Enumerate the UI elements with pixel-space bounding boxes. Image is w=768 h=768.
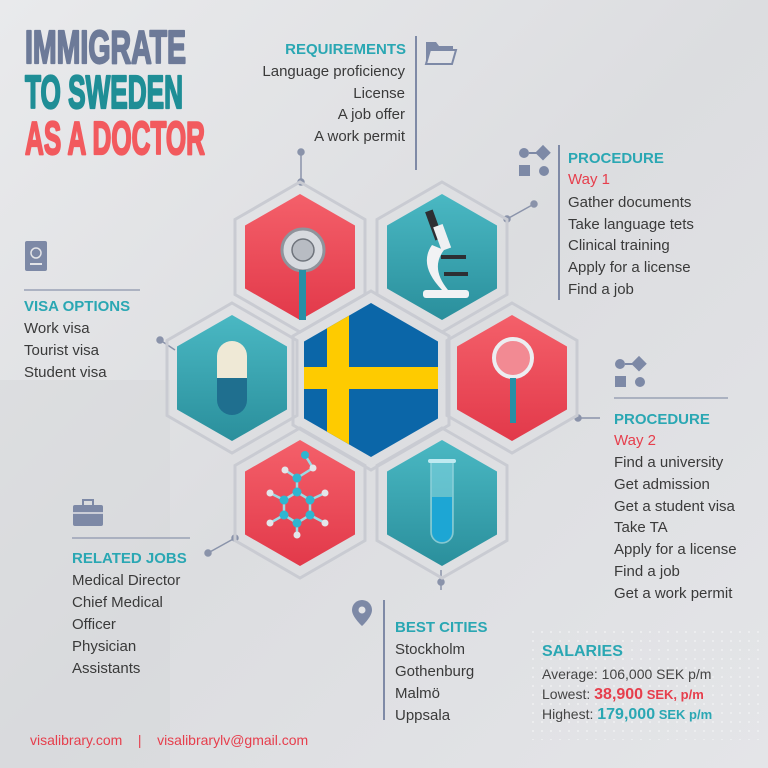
panel: requirements: REQUIREMENTS	[285, 41, 406, 58]
panel: related jobs: Medical Director	[72, 572, 180, 589]
panel: procedure way 1	[559, 145, 694, 300]
hex: test tube	[377, 428, 507, 578]
panel: procedure way 2: PROCEDURE	[614, 411, 710, 428]
panel: procedure way 2: Way 2	[614, 432, 656, 449]
panel: salaries: Lowest: 38,900 SEK, p/m	[542, 686, 704, 703]
panel: related jobs: Officer	[72, 616, 116, 633]
icon: location pin	[352, 600, 372, 626]
panel: best cities: Stockholm	[395, 641, 465, 658]
panel: requirements: Language proficiency	[262, 63, 405, 80]
panel: related jobs: Chief Medical	[72, 594, 163, 611]
panel: related jobs	[72, 538, 190, 677]
panel: visa options: Work visa	[24, 320, 90, 337]
panel: best cities: BEST CITIES	[395, 619, 488, 636]
icon: folder	[426, 42, 456, 64]
panel: requirements: A work permit	[314, 128, 406, 145]
panel: procedure way 2: Get a work permit	[614, 585, 733, 602]
panel: procedure way 1: Apply for a license	[568, 259, 691, 276]
hex: pill	[167, 303, 297, 453]
panel: best cities: Uppsala	[395, 707, 451, 724]
title: IMMIGRATE	[25, 21, 186, 73]
panel: salaries: Average: 106,000 SEK p/m	[542, 666, 711, 682]
hex: microscope	[377, 182, 507, 332]
hex: sweden flag	[293, 291, 449, 470]
panel: visa options: Student visa	[24, 364, 107, 381]
panel: procedure way 1: Way 1	[568, 171, 610, 188]
panel: best cities	[384, 600, 488, 724]
panel: requirements	[262, 36, 416, 170]
hex: stethoscope	[235, 182, 365, 332]
footer: visalibrary.com | visalibrarylv@gmail.com	[30, 732, 308, 748]
panel: related jobs: Assistants	[72, 660, 140, 677]
panel: related jobs: RELATED JOBS	[72, 550, 187, 567]
panel: procedure way 1: Find a job	[568, 281, 634, 298]
panel: procedure way 1: Take language tets	[568, 216, 694, 233]
panel: salaries	[542, 643, 712, 723]
connectors	[157, 149, 600, 590]
panel: procedure way 1: Clinical training	[568, 237, 670, 254]
panel: procedure way 2: Find a university	[614, 454, 724, 471]
icon: procedure 1	[519, 145, 551, 176]
panel: related jobs: Physician	[72, 638, 136, 655]
panel: procedure way 2: Take TA	[614, 519, 668, 536]
panel: requirements: A job offer	[338, 106, 405, 123]
panel: visa options: VISA OPTIONS	[24, 298, 130, 315]
panel: procedure way 2: Get a student visa	[614, 498, 736, 515]
title	[25, 21, 205, 164]
icon: procedure 2	[615, 356, 647, 387]
panel: salaries: SALARIES	[542, 643, 623, 660]
panel: visa options	[24, 290, 140, 381]
hex: magnifier	[447, 303, 577, 453]
panel: procedure way 2	[614, 398, 737, 602]
panel: salaries: Highest: 179,000 SEK p/m	[542, 706, 712, 723]
panel: requirements: License	[353, 85, 405, 102]
icon: passport	[25, 241, 47, 271]
panel: best cities: Malmö	[395, 685, 440, 702]
title: TO SWEDEN	[25, 66, 183, 118]
title: AS A DOCTOR	[25, 112, 205, 164]
panel: procedure way 2: Get admission	[614, 476, 710, 493]
hex cluster	[167, 182, 577, 578]
icon: briefcase	[73, 500, 103, 526]
panel: procedure way 1: PROCEDURE	[568, 150, 664, 167]
hex: molecule	[235, 428, 365, 578]
panel: procedure way 2: Apply for a license	[614, 541, 737, 558]
panel: best cities: Gothenburg	[395, 663, 474, 680]
panel: visa options: Tourist visa	[24, 342, 100, 359]
panel: procedure way 2: Find a job	[614, 563, 680, 580]
panel: procedure way 1: Gather documents	[568, 194, 691, 211]
